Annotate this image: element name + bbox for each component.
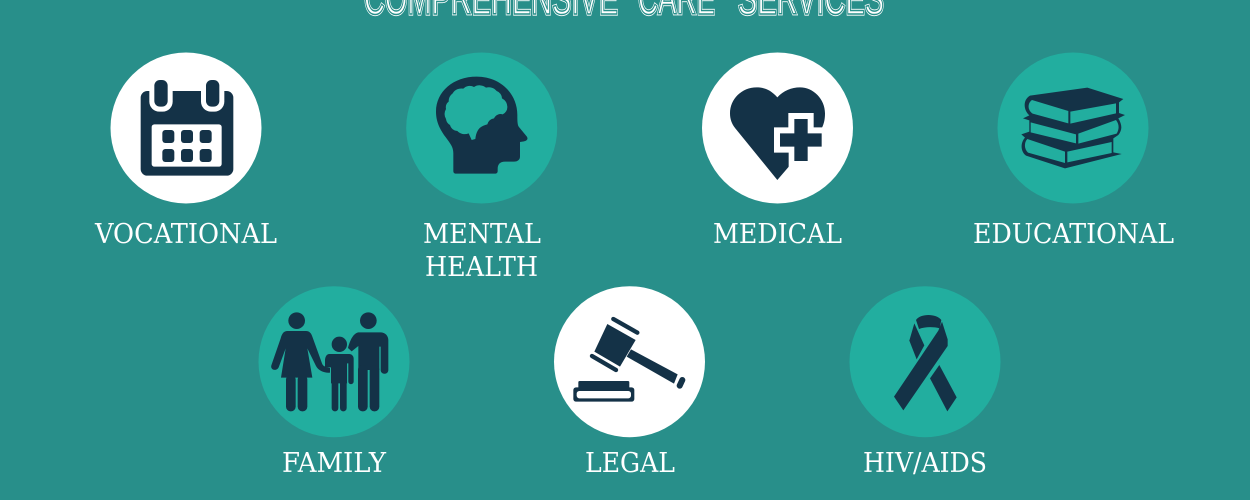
label: family: FAMILY: [282, 448, 387, 479]
panel: vocational: [94, 52, 277, 250]
label: legal: LEGAL: [585, 448, 675, 479]
label: hiv/aids: HIV/AIDS: [863, 448, 987, 479]
icon: head with brain: [406, 52, 557, 204]
label: educational: EDUCATIONAL: [973, 219, 1174, 250]
panel: mental health: [406, 52, 557, 283]
icon: gavel: [554, 286, 705, 437]
label: mental health: MENTAL: [423, 219, 541, 250]
panel: educational: [973, 52, 1174, 250]
panel: hiv/aids: [850, 286, 1000, 479]
panel: legal: [554, 286, 705, 479]
panel: medical: [702, 52, 853, 250]
label: mental health: HEALTH: [425, 252, 538, 283]
label: vocational: VOCATIONAL: [94, 219, 277, 250]
panel: family: [258, 286, 410, 479]
icon: awareness ribbon: [850, 286, 1000, 437]
icon: calendar: [110, 52, 262, 204]
icon: family: [258, 286, 410, 437]
label: mental health: [423, 219, 541, 283]
label: medical: MEDICAL: [713, 219, 842, 250]
icon: stack of books: [998, 52, 1148, 204]
icon: heart with cross: [702, 52, 853, 204]
